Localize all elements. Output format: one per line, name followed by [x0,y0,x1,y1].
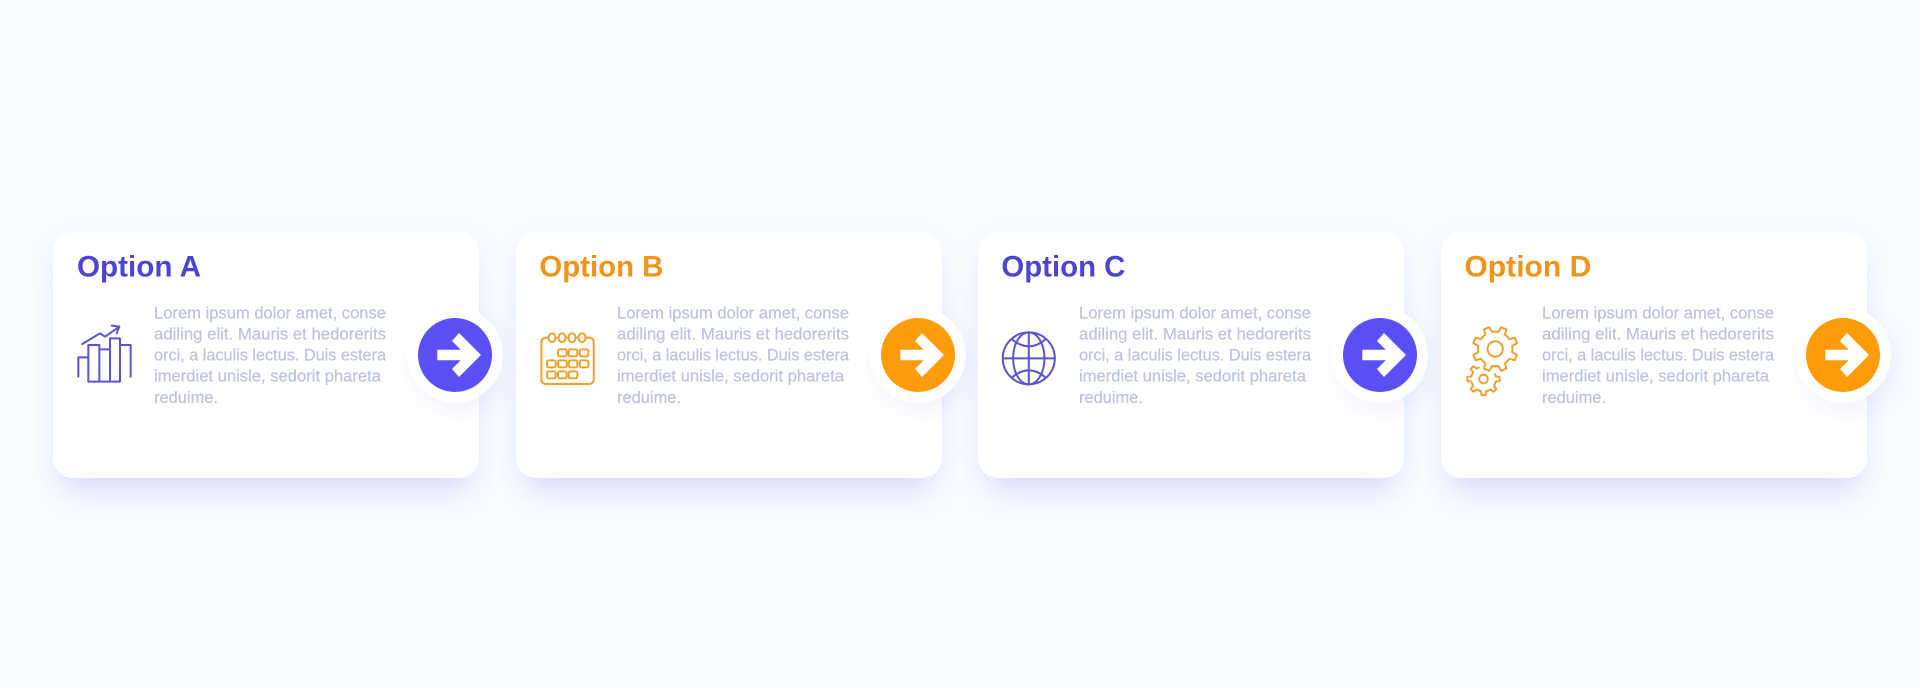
text block: Option C description: orci, a laculis lectus. Duis estera [1079,347,1312,365]
text block: Option D description: adiling elit. Mauris et hedorerits [1542,326,1774,344]
arrow button [418,318,492,392]
heading: Option C: Option C [1002,250,1126,284]
text block: Option A description: Lorem ipsum dolor amet, conse [154,304,386,322]
icon: rising bar chart [78,326,131,382]
text block: Option C description: adiling elit. Mauris et hedorerits [1079,326,1311,344]
text block: Option B description: imerdiet unisle, sedorit phareta [617,368,844,386]
icon: globe [1003,332,1055,384]
arrow button [1806,318,1880,392]
text block: Option C description: imerdiet unisle, sedorit phareta [1079,368,1307,386]
panel: Option C [977,250,1429,500]
heading: Option D: Option D [1464,250,1591,284]
arrow button [1343,318,1417,392]
text block: Option D description: imerdiet unisle, sedorit phareta [1542,368,1770,386]
arrow button [881,318,955,392]
text block: Option D description: Lorem ipsum dolor amet, conse [1542,304,1774,322]
text block: Option B description: orci, a laculis lectus. Duis estera [617,347,849,365]
text block: Option C description: Lorem ipsum dolor amet, conse [1079,304,1311,322]
heading: Option B: Option B [539,250,663,284]
text block: Option B description: reduime. [617,389,681,407]
text block: Option A description: orci, a laculis lectus. Duis estera [154,347,387,365]
panel: Option D [1440,250,1892,500]
panel: Option A [52,250,504,500]
text block: Option B description [617,304,849,407]
icon: gears [1466,320,1524,395]
panel: Option B [515,250,967,500]
text block: Option D description [1542,304,1775,407]
text block: Option A description: adiling elit. Mauris et hedorerits [154,326,386,344]
text block: Option C description [1079,304,1312,407]
text block: Option A description: imerdiet unisle, sedorit phareta [154,368,382,386]
icon: calendar [541,333,593,384]
text block: Option D description: reduime. [1542,389,1606,407]
heading: Option A: Option A [77,250,201,284]
text block: Option C description: reduime. [1079,389,1143,407]
text block: Option A description: reduime. [154,389,218,407]
text block: Option D description: orci, a laculis lectus. Duis estera [1542,347,1775,365]
text block: Option B description: adiling elit. Mauris et hedorerits [617,326,849,344]
text block: Option A description [154,304,387,407]
text block: Option B description: Lorem ipsum dolor amet, conse [617,304,849,322]
